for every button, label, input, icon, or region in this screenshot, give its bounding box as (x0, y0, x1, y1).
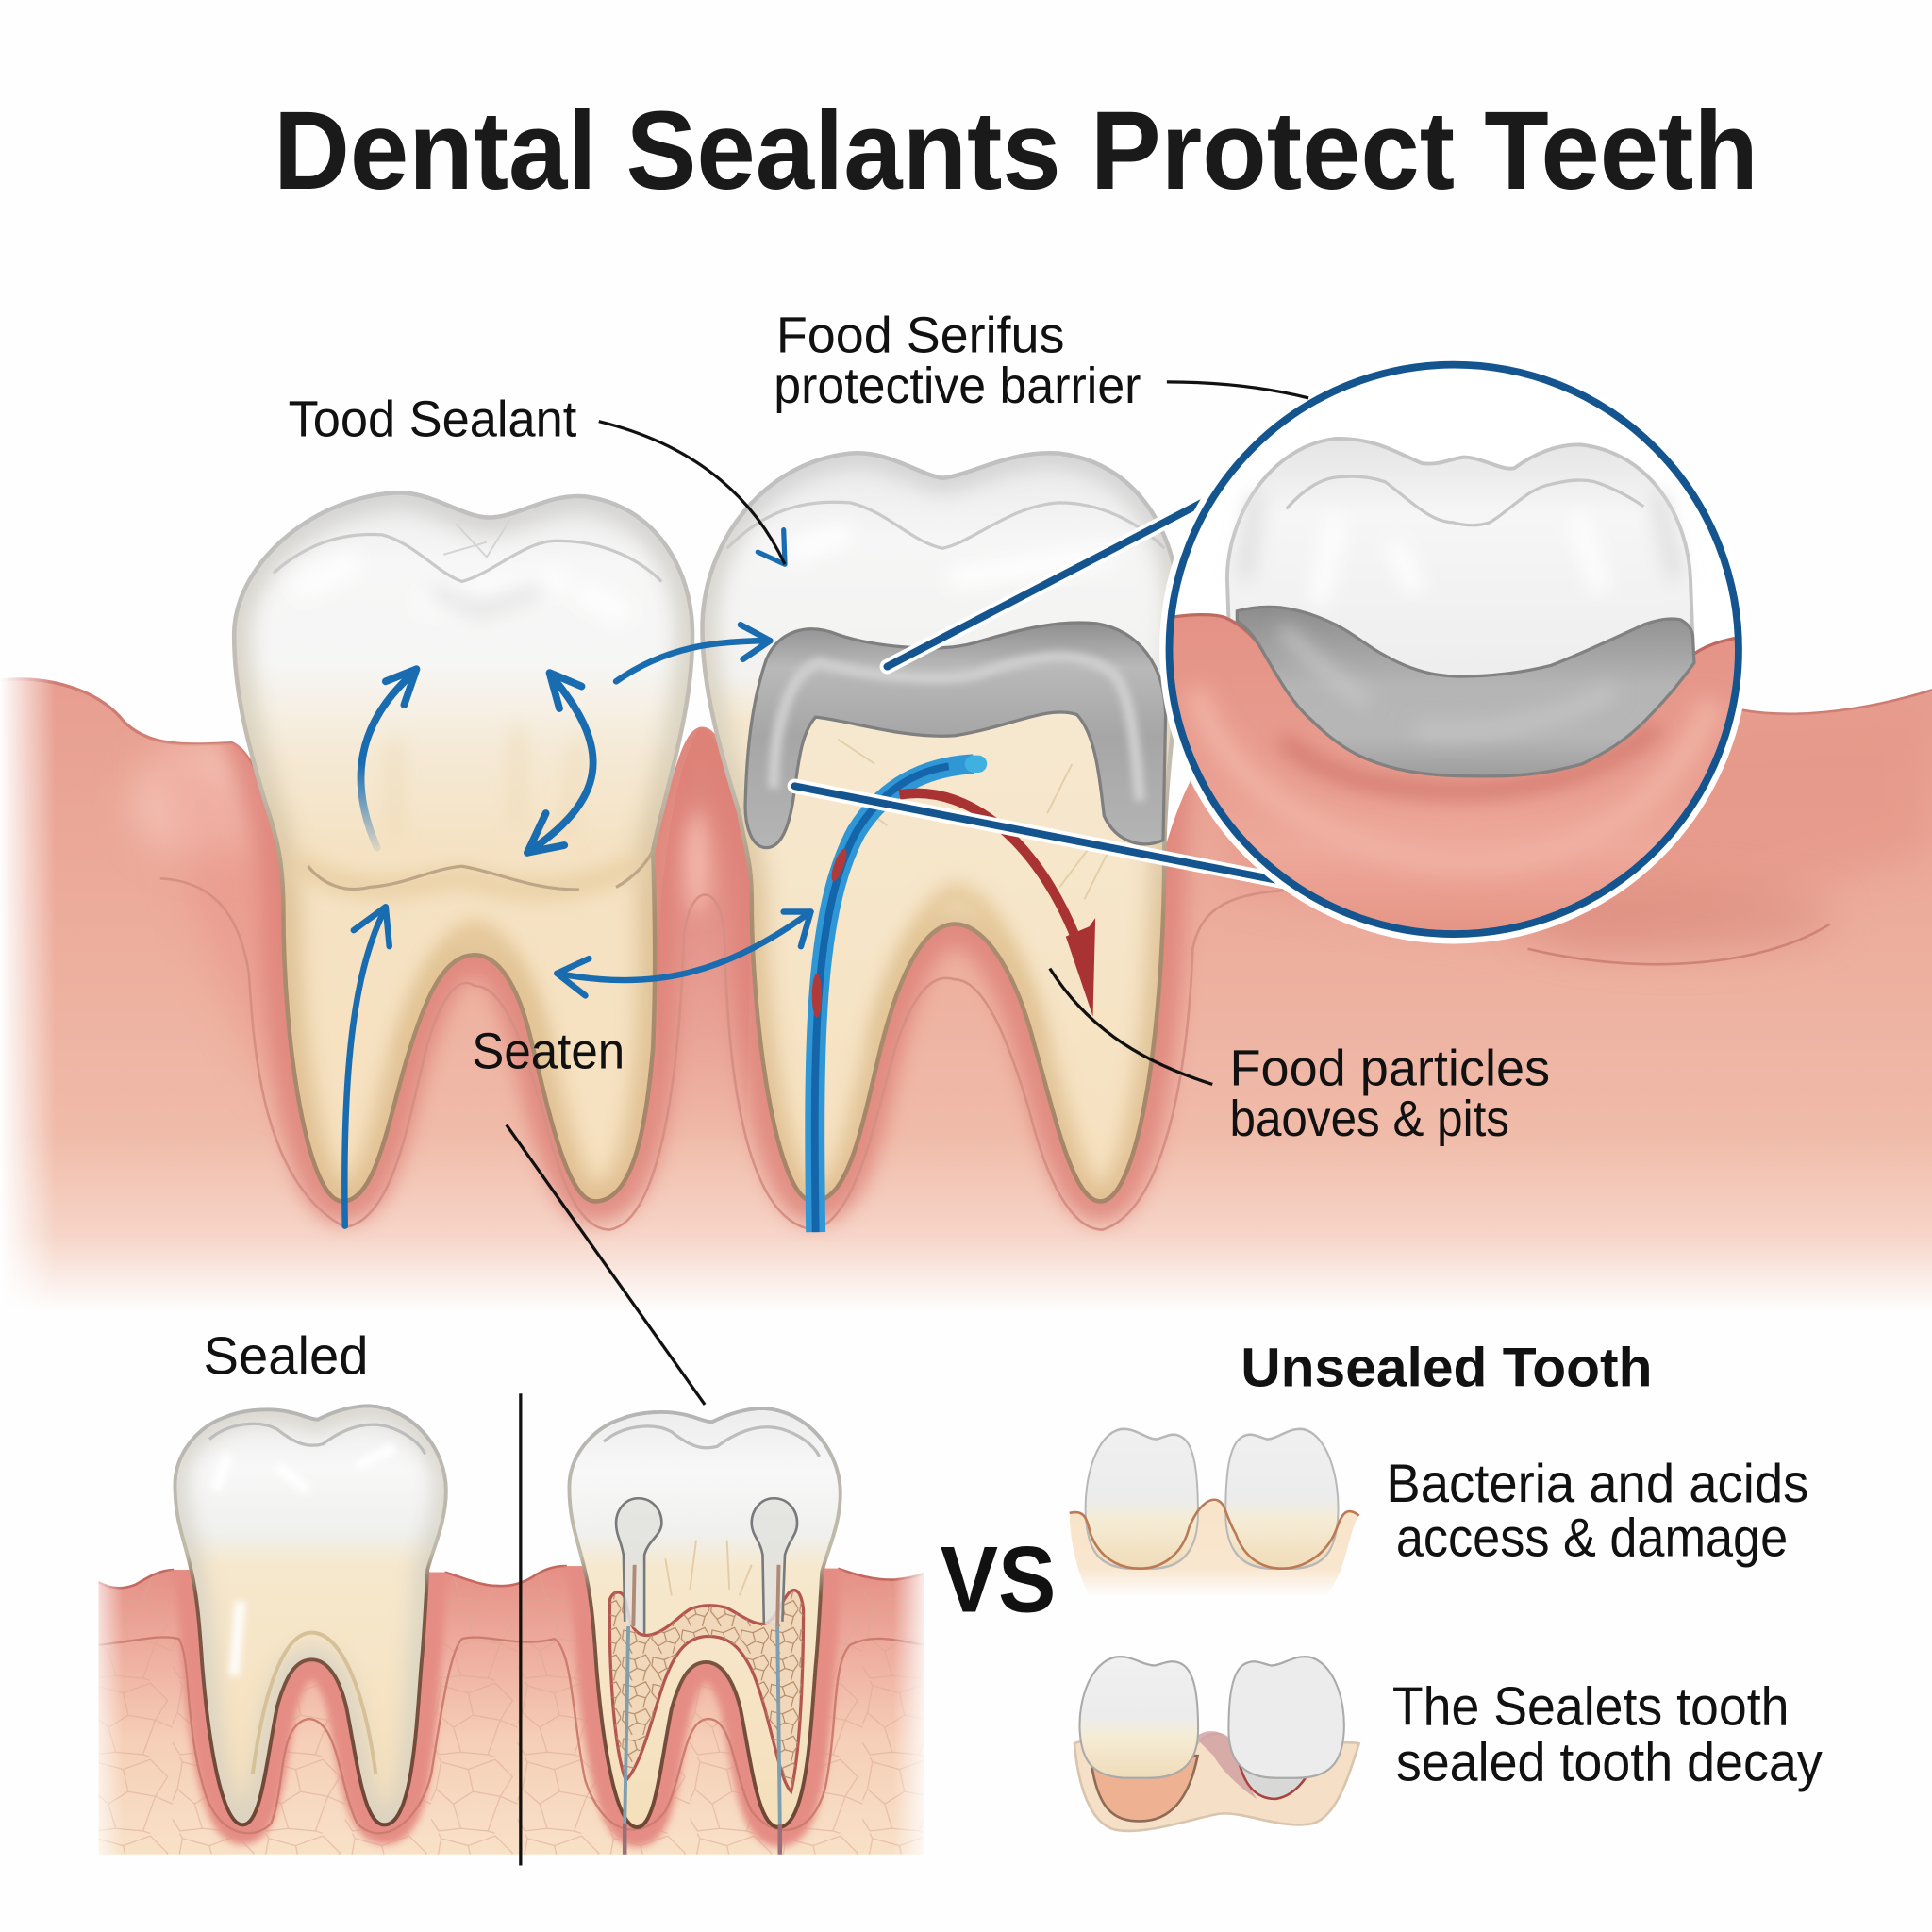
labels on main diagram: Food Serifus (776, 308, 1064, 364)
labels on main diagram: Food particles (1230, 1041, 1550, 1097)
comparison gum (98, 1564, 924, 1855)
leader lines (507, 382, 1308, 1405)
VS label: VS (941, 1527, 1056, 1632)
gum shading (136, 453, 1932, 1230)
magnified sealant (1237, 607, 1694, 776)
arrow: red decay path (899, 793, 1095, 1017)
labels on main diagram (289, 308, 1550, 1147)
title: Dental Sealants Protect Teeth (274, 89, 1758, 212)
description: sealants: sealed tooth decay (1396, 1732, 1823, 1792)
tooth: right molar with sealant (702, 453, 1180, 1201)
sealant layer (745, 623, 1166, 848)
magnified gum (1173, 613, 1735, 930)
treatment tooth with canals (569, 1408, 841, 1855)
infected tissue (609, 1591, 804, 1791)
gum tissue (4, 677, 1932, 1300)
panel: main tooth and gum cross-section (0, 308, 1932, 1405)
description: bacteria: access & damage (1396, 1508, 1788, 1569)
magnified tooth (1225, 437, 1694, 675)
arrow: blue canal path (812, 764, 978, 1232)
labels on main diagram: Tood Sealant (289, 391, 576, 447)
callout connector lines (794, 496, 1288, 882)
description: bacteria (1386, 1454, 1808, 1569)
labels on main diagram: baoves & pits (1230, 1091, 1509, 1147)
divider (520, 1393, 522, 1865)
tooth: left molar (234, 492, 692, 1201)
labels on main diagram: Seaten (472, 1024, 625, 1079)
sealed label: Sealed (204, 1325, 369, 1385)
canal bulbs (616, 1498, 661, 1634)
icon: healthy teeth (1070, 1429, 1359, 1597)
sealed tooth (175, 1406, 446, 1824)
description: sealants (1392, 1677, 1823, 1792)
panel: unsealed tooth (1070, 1337, 1823, 1831)
icon: decayed teeth (1074, 1657, 1359, 1831)
panel: sealed comparison (86, 1325, 1056, 1865)
callout: magnified sealant circle (1146, 358, 1762, 961)
heading: Unsealed Tooth (1241, 1337, 1653, 1398)
description: bacteria: Bacteria and acids (1386, 1454, 1808, 1514)
arrows: blue movement arrows (344, 530, 810, 1226)
description: sealants: The Sealets tooth (1392, 1677, 1789, 1738)
labels on main diagram: protective barrier (774, 358, 1141, 414)
